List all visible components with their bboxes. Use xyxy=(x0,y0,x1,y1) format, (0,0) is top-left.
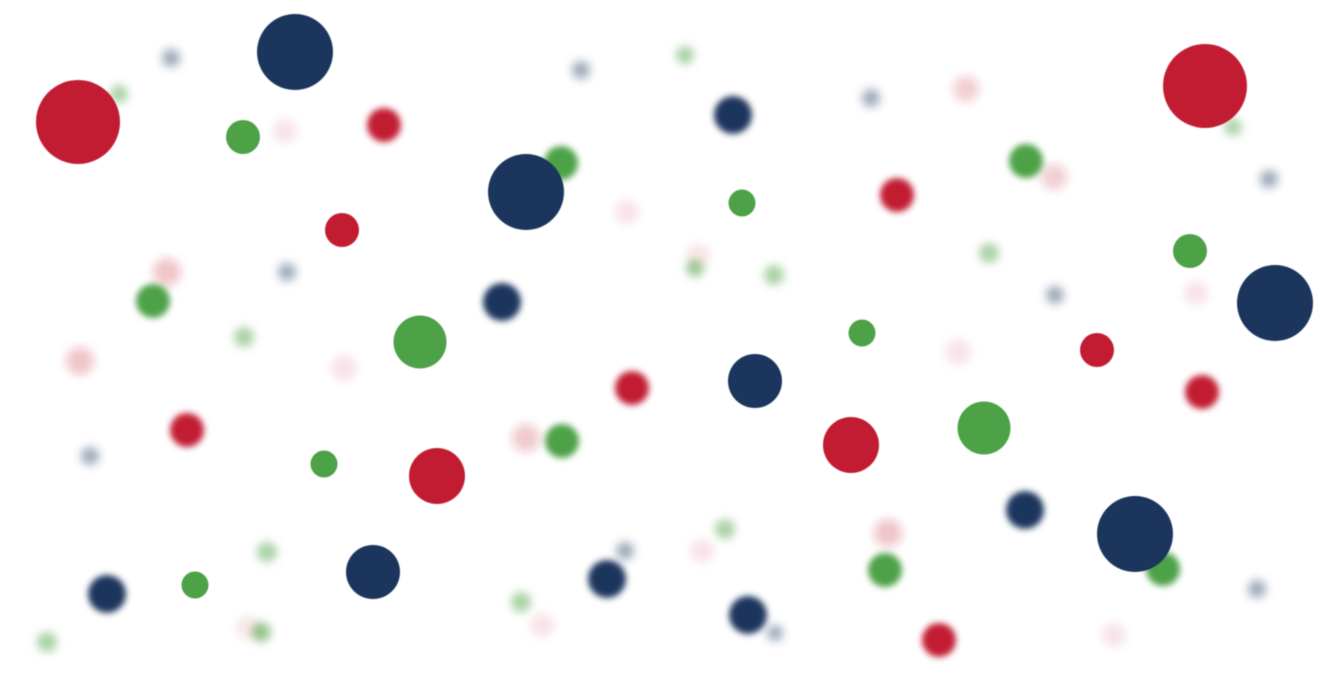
near layer: sharp small and medium dots xyxy=(182,120,1207,599)
front layer: large sharp dots xyxy=(36,14,1313,572)
middle layer: blurred dots xyxy=(88,96,1219,657)
